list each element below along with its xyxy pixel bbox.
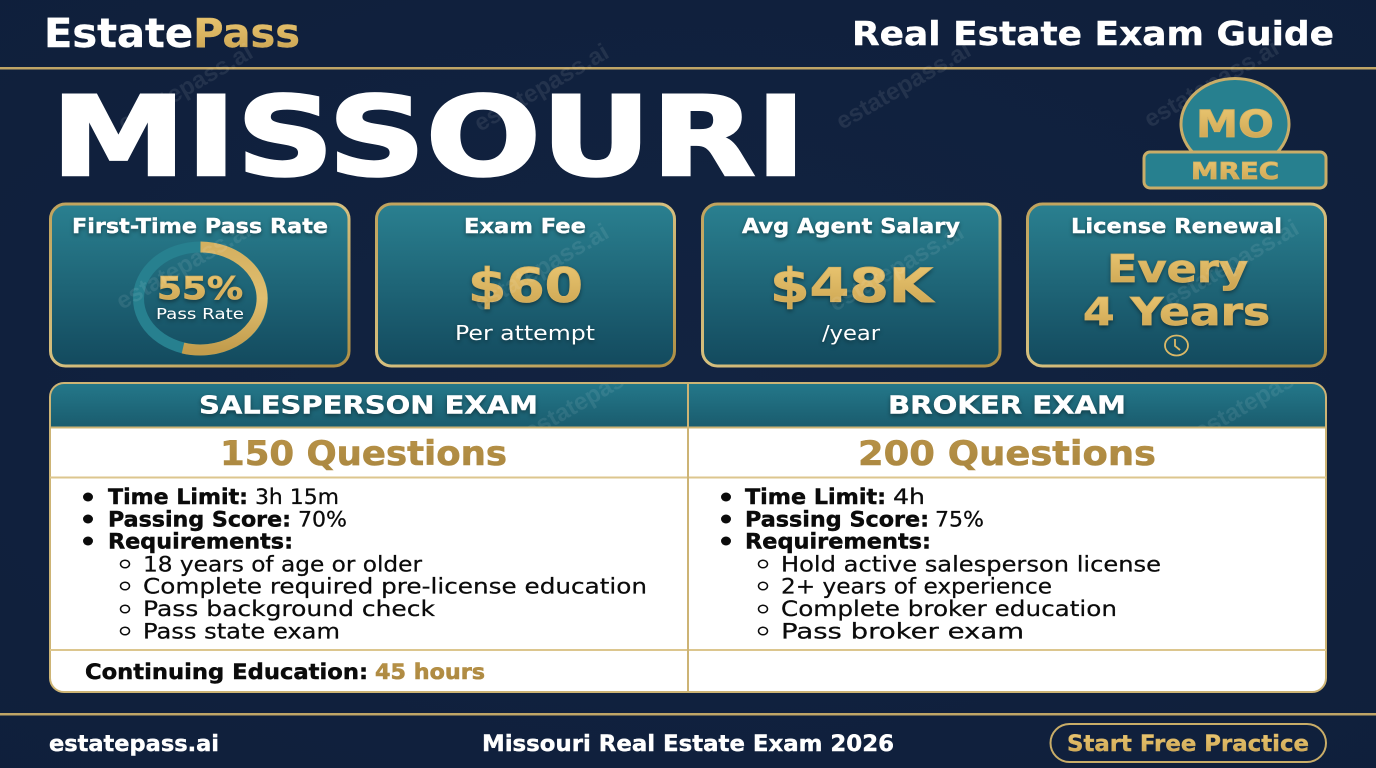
stat card: pass rate [50, 204, 349, 366]
progress ring [138, 247, 262, 350]
card heading: First-Time Pass Rate [72, 214, 328, 238]
comparison table [49, 382, 1327, 693]
header brand logo: EstatePass [44, 11, 300, 57]
salary caption: /year [822, 321, 881, 345]
salesperson details list: Requirements: [108, 530, 293, 554]
stat card: exam fee [376, 204, 674, 366]
broker details list: 2+ years of experience [781, 574, 1052, 600]
broker details list: Pass broker exam [781, 620, 1024, 644]
salesperson details list: 70% [298, 508, 347, 532]
broker heading: BROKER EXAM [888, 390, 1126, 420]
salesperson details list [83, 485, 647, 644]
ring caption: Pass Rate [156, 305, 244, 323]
salary value: $48K [770, 259, 935, 314]
card heading: Avg Agent Salary [742, 214, 960, 238]
broker details list: Passing Score: [745, 508, 929, 532]
broker details list: Time Limit: [745, 485, 886, 510]
card watermarks: estatepass.ai [1160, 214, 1304, 313]
ring value: 55% [157, 271, 243, 307]
stat card: salary [702, 204, 1000, 366]
salesperson details list: Pass background check [143, 597, 436, 622]
continuing education: 45 hours [375, 660, 485, 685]
salesperson details list: Passing Score: [108, 508, 291, 532]
table header band [51, 384, 1325, 426]
broker details list: 75% [935, 508, 984, 532]
salesperson details list: 18 years of age or older [143, 552, 422, 578]
table header band: estatepass.ai [1190, 346, 1334, 445]
salesperson heading: SALESPERSON EXAM [199, 390, 538, 420]
continuing education: Continuing Education: [85, 660, 368, 685]
card watermarks [112, 214, 1304, 317]
badge circle [1181, 78, 1289, 170]
salesperson details list: Complete required pre-license education [143, 574, 647, 600]
card watermarks: estatepass.ai [112, 216, 256, 315]
renewal value [1083, 247, 1270, 335]
table header band: estatepass.ai [520, 346, 664, 445]
state title: MISSOURI [51, 73, 806, 201]
footer label: Missouri Real Estate Exam 2026 [482, 732, 894, 757]
broker question count: 200 Questions [858, 434, 1156, 473]
card watermarks: estatepass.ai [824, 218, 969, 317]
badge band [1144, 152, 1326, 188]
badge: MO MREC [1144, 78, 1326, 188]
footer rule [0, 713, 1376, 716]
watermarks: estatepass.ai [470, 38, 614, 137]
fee caption: Per attempt [455, 321, 595, 345]
card heading: License Renewal [1071, 214, 1282, 238]
salesperson question count: 150 Questions [220, 434, 507, 473]
salesperson details list: 3h 15m [255, 485, 339, 510]
continuing education [85, 660, 485, 685]
card watermarks: estatepass.ai [470, 218, 614, 317]
badge band: MREC [1191, 157, 1279, 185]
stat card: renewal [1028, 204, 1326, 366]
watermarks [114, 34, 1284, 137]
broker details list: 4h [893, 485, 925, 510]
broker details list: Requirements: [745, 530, 931, 554]
renewal value: Every [1107, 247, 1248, 292]
salesperson details list: Pass state exam [143, 620, 340, 644]
salesperson details list: Time Limit: [108, 485, 248, 510]
header title: Real Estate Exam Guide [852, 14, 1334, 53]
header rule [0, 67, 1376, 70]
broker details list: Complete broker education [781, 597, 1117, 622]
call to action button: Start Free Practice [1067, 732, 1309, 757]
watermarks: estatepass.ai [1140, 34, 1284, 133]
icon: clock [1165, 336, 1188, 356]
watermarks: estatepass.ai [832, 36, 976, 135]
broker details list: Hold active salesperson license [781, 552, 1161, 578]
footer site: estatepass.ai [49, 732, 219, 757]
renewal value: 4 Years [1083, 290, 1270, 335]
fee value: $60 [468, 259, 583, 314]
broker details list [721, 485, 1161, 644]
call to action button [1050, 724, 1326, 762]
badge circle: MO [1196, 103, 1274, 146]
card heading: Exam Fee [464, 214, 586, 238]
watermarks: estatepass.ai [114, 38, 258, 137]
